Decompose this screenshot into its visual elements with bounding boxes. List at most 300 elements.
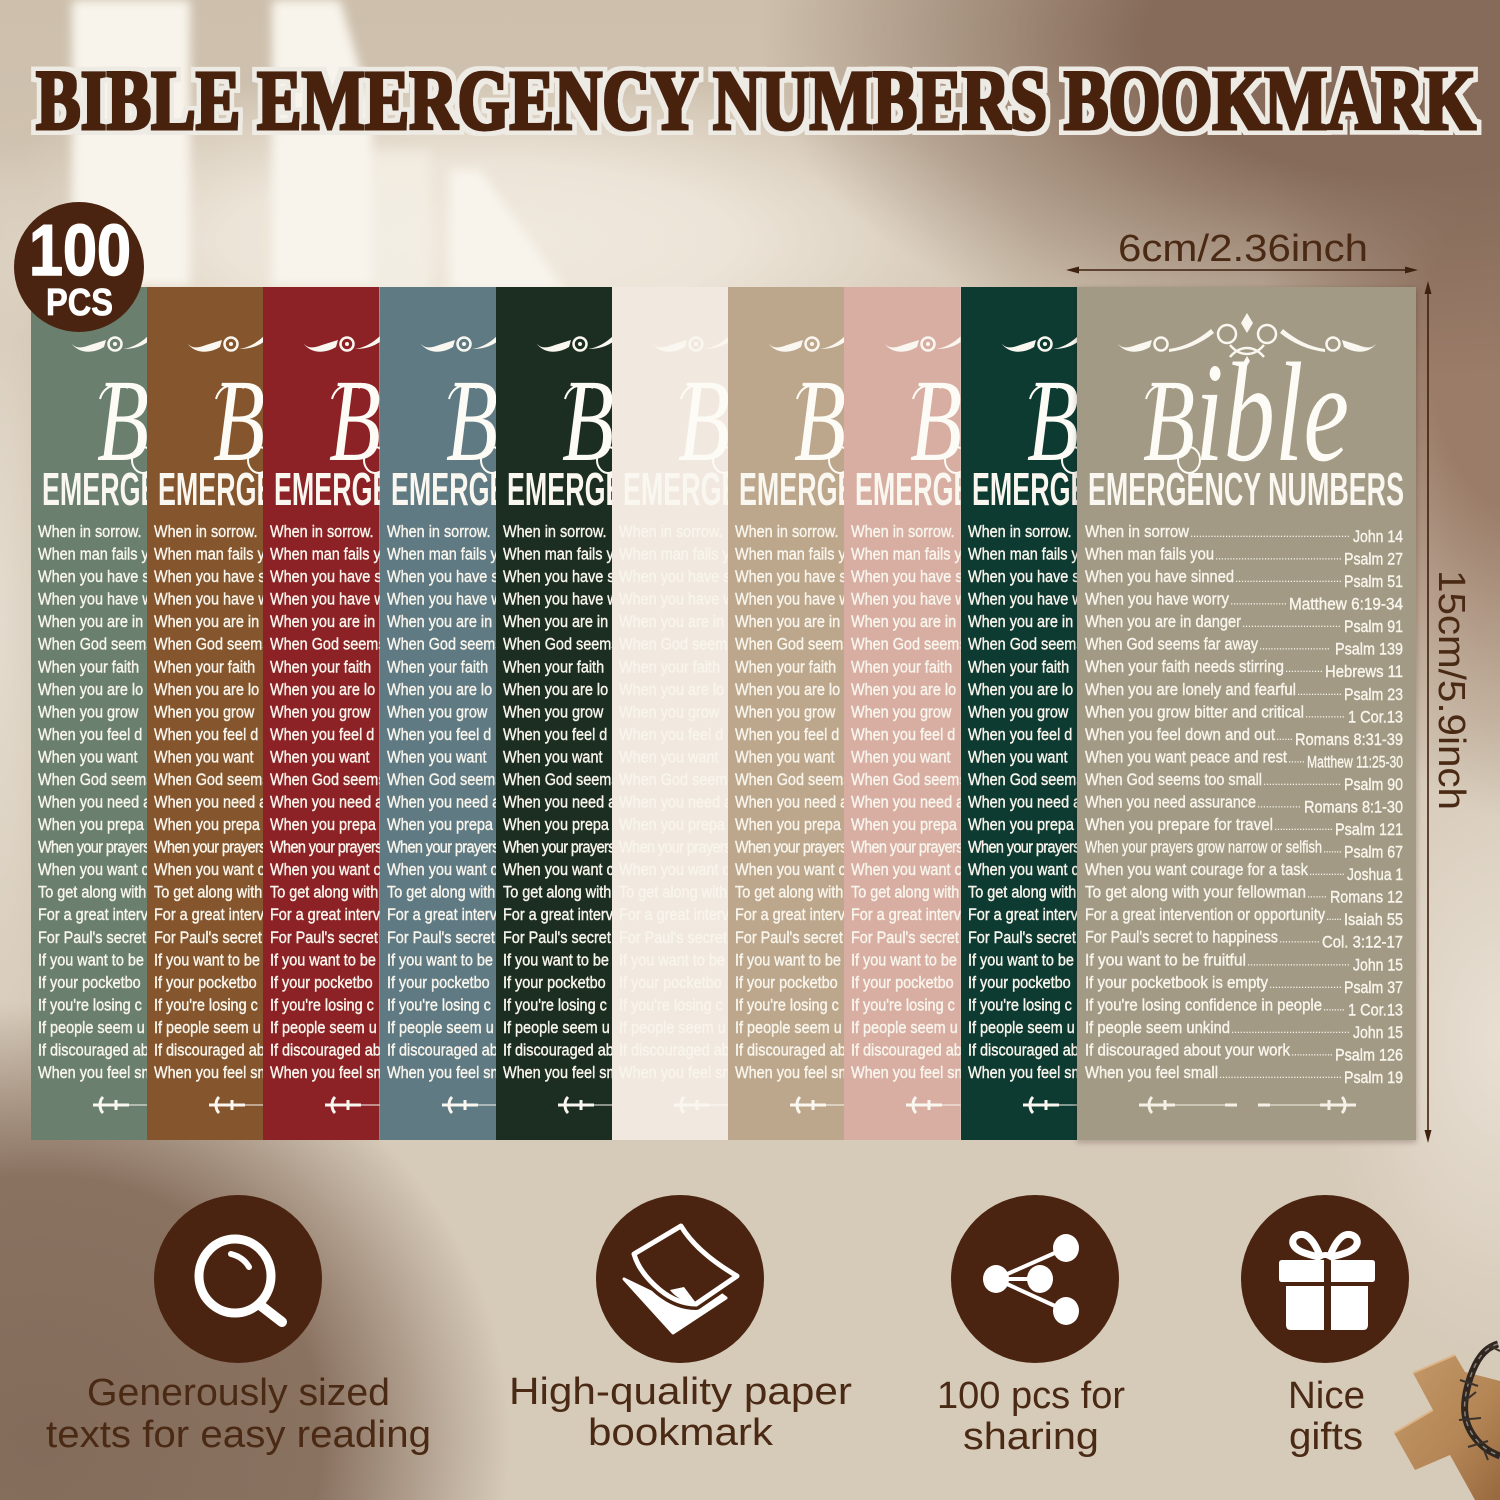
bookmark 6: cream: When you have w bbox=[619, 591, 734, 609]
verse list: Romans 8:1-30 bbox=[1304, 798, 1403, 816]
verse list: Psalm 91 bbox=[1344, 617, 1403, 636]
bookmark 9: deep teal green: If discouraged ab bbox=[968, 1041, 1079, 1060]
bookmark 6: cream: When your faith bbox=[619, 658, 720, 677]
bookmark 2: brown: When you feel d bbox=[154, 726, 258, 744]
bookmark 4: slate blue: When you are in bbox=[387, 613, 492, 632]
bookmark 8: blush pink bbox=[844, 287, 960, 1140]
verse list: Psalm 139 bbox=[1335, 640, 1403, 659]
bookmark 3: red: When you have s bbox=[270, 568, 382, 586]
bookmark 1: sage green: When God seems bbox=[38, 771, 154, 789]
verse list: If you're losing confidence in people bbox=[1085, 995, 1322, 1014]
bookmark 7: tan: When your faith bbox=[735, 658, 836, 677]
verse list: ......................... bbox=[1269, 977, 1342, 991]
bookmark 2: brown: EMERGENCY NUMBERS bbox=[158, 463, 474, 515]
bookmark 9: deep teal green: When God seems bbox=[968, 771, 1084, 789]
bookmark 9: deep teal green: For a great interv bbox=[968, 906, 1078, 925]
bookmark 1: sage green: When your prayers bbox=[38, 839, 151, 857]
bookmark 6: cream: For a great interv bbox=[619, 906, 729, 925]
bookmark 5: dark green: When you need a bbox=[503, 794, 616, 812]
verse list: When you want courage for a task bbox=[1085, 860, 1308, 879]
bookmark 7: tan: When God seems bbox=[735, 636, 851, 654]
icon: wooden cross with crown of thorns bbox=[1394, 1344, 1500, 1500]
bookmark 3: red: When you want bbox=[270, 748, 370, 767]
script word: Bible: Bible bbox=[1143, 333, 1349, 491]
bookmark 5: dark green: When you prepa bbox=[503, 816, 609, 834]
bookmark 4: slate blue bbox=[380, 287, 496, 1140]
bookmark 2: brown: When in sorrow. bbox=[154, 523, 257, 541]
bookmark 1: sage green: When you grow bbox=[38, 703, 139, 722]
bookmark 8: blush pink: When you need a bbox=[851, 794, 964, 812]
bookmark 6: cream: When in sorrow. bbox=[619, 523, 722, 541]
bookmark 4: slate blue: When you need a bbox=[387, 794, 500, 812]
bookmark 3: red: EMERGENCY NUMBERS bbox=[274, 463, 590, 515]
feature: paper quality bbox=[509, 1195, 852, 1454]
bookmark 7: tan: When you grow bbox=[735, 703, 836, 722]
bookmark 5: dark green: When your prayers bbox=[503, 839, 616, 857]
bookmark 3: red: For a great interv bbox=[270, 906, 380, 925]
verse list: ........ bbox=[1323, 999, 1345, 1013]
bookmark 3: red: When man fails y bbox=[270, 546, 381, 564]
verse list: When your faith needs stirring bbox=[1085, 657, 1284, 676]
caption: gifts bbox=[1289, 1416, 1363, 1458]
verse list: When God seems far away bbox=[1085, 635, 1258, 654]
verse list: ....... bbox=[1307, 887, 1327, 901]
bookmark 7: tan: When you want bbox=[735, 748, 835, 767]
bookmark 9: deep teal green: When you have w bbox=[968, 591, 1083, 609]
bookmark 7: tan: When God seems bbox=[735, 771, 851, 789]
bookmark 2: brown: To get along with bbox=[154, 884, 262, 902]
bookmark 1: sage green: When you need a bbox=[38, 794, 151, 812]
verse list: Matthew 6:19-34 bbox=[1289, 595, 1403, 614]
badge: 100 PCS: PCS bbox=[46, 282, 113, 324]
verse list: ............... bbox=[1257, 796, 1301, 810]
bookmark 9: deep teal green: For Paul's secret bbox=[968, 929, 1076, 947]
bookmark 3: red: When in sorrow. bbox=[270, 523, 373, 541]
bookmark 3: red: When God seems bbox=[270, 771, 386, 789]
bookmark 2: brown: When you are in bbox=[154, 613, 259, 632]
bookmark 8: blush pink: When you have s bbox=[851, 568, 963, 586]
bookmark 7: tan: When you feel sm bbox=[735, 1064, 851, 1082]
caption: High-quality paper bbox=[509, 1371, 852, 1413]
bookmark 3: red: When you grow bbox=[270, 703, 371, 722]
bookmark 5: dark green: For Paul's secret bbox=[503, 929, 611, 947]
verse list: When you feel small bbox=[1085, 1063, 1218, 1082]
bookmark 9: deep teal green: When you prepa bbox=[968, 816, 1074, 834]
bookmark 6: cream: When your prayers bbox=[619, 839, 732, 857]
bookmark 2: brown: When you want bbox=[154, 748, 254, 767]
verse list: When you prepare for travel bbox=[1085, 815, 1273, 834]
bookmark 9: deep teal green: When you are lo bbox=[968, 681, 1073, 699]
bookmark 2: brown: When you feel sm bbox=[154, 1064, 270, 1082]
bookmark 1: sage green: When you are lo bbox=[38, 681, 143, 699]
bookmark 3: red: Bible bbox=[329, 333, 535, 491]
bookmark 7: tan: For a great interv bbox=[735, 906, 845, 925]
bookmark 5: dark green: When you feel d bbox=[503, 726, 607, 744]
bookmark 8: blush pink: When you are lo bbox=[851, 681, 956, 699]
bookmark 2: brown: When you grow bbox=[154, 703, 255, 722]
bookmark 4: slate blue: When you have w bbox=[387, 591, 502, 609]
bookmark 5: dark green: When you are lo bbox=[503, 681, 608, 699]
bookmark 4: slate blue: To get along with bbox=[387, 884, 495, 902]
bookmark 6: cream: When you are lo bbox=[619, 681, 724, 699]
bookmark 6: cream: Bible bbox=[678, 333, 884, 491]
bookmark 6: cream: If you want to be bbox=[619, 951, 725, 970]
verse list: Hebrews 11 bbox=[1325, 662, 1403, 681]
bookmark 5: dark green: EMERGENCY NUMBERS bbox=[507, 463, 823, 515]
bookmark 8: blush pink: When God seems bbox=[851, 636, 967, 654]
bookmark 2: brown: If you want to be bbox=[154, 951, 260, 970]
bookmark 1: sage green: If discouraged ab bbox=[38, 1041, 149, 1060]
bookmark 6: cream: When you want bbox=[619, 748, 719, 767]
bookmark 1: sage green: When you want bbox=[38, 748, 138, 767]
verse list: When you are in danger bbox=[1085, 612, 1241, 631]
verse list: To get along with your fellowman bbox=[1085, 883, 1306, 902]
bookmark 1: sage green bbox=[31, 287, 147, 1140]
bookmark 1: sage green: When man fails y bbox=[38, 546, 149, 564]
bookmark 8: blush pink: When God seems bbox=[851, 771, 967, 789]
bookmark 9: deep teal green: When you need a bbox=[968, 794, 1081, 812]
bookmark 4: slate blue: When in sorrow. bbox=[387, 523, 490, 541]
bookmark 3: red: When God seems bbox=[270, 636, 386, 654]
bookmark 8: blush pink: If people seem u bbox=[851, 1019, 958, 1037]
bookmark 4: slate blue: When you want c bbox=[387, 861, 498, 879]
bookmark 5: dark green: To get along with bbox=[503, 884, 611, 902]
bookmark 6: cream: When you grow bbox=[619, 703, 720, 722]
bookmark 1: sage green: EMERGENCY NUMBERS bbox=[42, 463, 358, 515]
bookmark 5: dark green: If discouraged ab bbox=[503, 1041, 614, 1060]
bookmark 4: slate blue: If you want to be bbox=[387, 951, 493, 970]
bookmark 5: dark green: For a great interv bbox=[503, 906, 613, 925]
bookmark 8: blush pink: If your pocketbo bbox=[851, 974, 954, 992]
bookmark 7: tan: When you prepa bbox=[735, 816, 841, 834]
verse list: Psalm 90 bbox=[1344, 775, 1403, 794]
verse list: Psalm 19 bbox=[1344, 1068, 1403, 1087]
verse list: If people seem unkind bbox=[1085, 1018, 1230, 1037]
bookmark 4: slate blue: When you grow bbox=[387, 703, 488, 722]
caption: Generously sized bbox=[87, 1372, 390, 1414]
bookmark 7: tan bbox=[728, 287, 844, 1140]
verse list: When you have sinned bbox=[1085, 567, 1234, 586]
bookmark 9: deep teal green: When you want c bbox=[968, 861, 1079, 879]
bookmark 7: tan: When your prayers bbox=[735, 839, 848, 857]
verse list: John 15 bbox=[1353, 1023, 1403, 1042]
bookmark 9: deep teal green: When God seems bbox=[968, 636, 1084, 654]
bookmark 7: tan: When man fails y bbox=[735, 546, 846, 564]
verse list: When you need assurance bbox=[1085, 792, 1256, 812]
verse list: ........................................... bbox=[1219, 1067, 1342, 1081]
bookmark 4: slate blue: When you have s bbox=[387, 568, 499, 586]
bookmark 6: cream: EMERGENCY NUMBERS bbox=[623, 463, 939, 515]
verse list: .................................... bbox=[1247, 954, 1350, 968]
verse list: .................................. bbox=[1242, 616, 1341, 630]
bookmark 9: deep teal green: When your prayers bbox=[968, 839, 1081, 857]
bookmark 8: blush pink: Bible bbox=[910, 333, 1116, 491]
bookmark 7: tan: When you feel d bbox=[735, 726, 839, 744]
verse list: ............. bbox=[1309, 864, 1345, 878]
icon: magnifier bbox=[154, 1195, 322, 1363]
bookmark 7: tan: For Paul's secret bbox=[735, 929, 843, 947]
verse list: 1 Cor.13 bbox=[1348, 1000, 1403, 1019]
bookmark 3: red: When your faith bbox=[270, 658, 371, 677]
bookmark 7: tan: When you have w bbox=[735, 591, 850, 609]
verse list: Col. 3:12-17 bbox=[1322, 933, 1403, 952]
caption bbox=[1288, 1375, 1365, 1458]
bookmark 4: slate blue: Bible bbox=[446, 333, 652, 491]
bookmark 8: blush pink: When you want bbox=[851, 748, 951, 767]
bookmark 7: tan: When you are lo bbox=[735, 681, 840, 699]
bookmark 4: slate blue: If people seem u bbox=[387, 1019, 494, 1037]
bookmark 7: tan: If discouraged ab bbox=[735, 1041, 846, 1060]
bookmark 1: sage green: If you're losing c bbox=[38, 996, 142, 1015]
bookmark 4: slate blue: When your prayers bbox=[387, 839, 500, 857]
bookmark 3: red: When you are lo bbox=[270, 681, 375, 699]
verse list: If your pocketbook is empty bbox=[1085, 973, 1268, 992]
bookmark 4: slate blue: When you feel d bbox=[387, 726, 491, 744]
verse list: Isaiah 55 bbox=[1344, 910, 1403, 929]
bookmark 5: dark green: When you grow bbox=[503, 703, 604, 722]
bookmark 1: sage green: When in sorrow. bbox=[38, 523, 141, 541]
bookmark 6: cream: For Paul's secret bbox=[619, 929, 727, 947]
bookmark 9: deep teal green: If you're losing c bbox=[968, 996, 1072, 1015]
verse list: When your prayers grow narrow or selfish bbox=[1085, 838, 1322, 857]
icon: paper sheets bbox=[596, 1195, 764, 1363]
verse list: Psalm 37 bbox=[1344, 978, 1403, 997]
verse list: ...... bbox=[1276, 729, 1293, 743]
bookmark 2: brown: When you have w bbox=[154, 591, 269, 609]
verse list: When you feel down and out bbox=[1085, 725, 1275, 744]
bookmark 6: cream: If you're losing c bbox=[619, 996, 723, 1015]
bookmark 5: dark green: When in sorrow. bbox=[503, 523, 606, 541]
bookmark 3: red: For Paul's secret bbox=[270, 929, 378, 947]
verse list: Romans 8:31-39 bbox=[1295, 730, 1403, 749]
verse list: ............................................ bbox=[1215, 548, 1342, 562]
bookmark 8: blush pink: If discouraged ab bbox=[851, 1041, 962, 1060]
bookmark 4: slate blue: When you are lo bbox=[387, 681, 492, 699]
feature: large text bbox=[46, 1195, 431, 1456]
bookmark 3: red: If you want to be bbox=[270, 951, 376, 970]
verse list: John 15 bbox=[1353, 955, 1403, 974]
bookmark 3: red: If people seem u bbox=[270, 1019, 377, 1037]
caption: sharing bbox=[963, 1416, 1099, 1458]
bookmark 6: cream: When man fails y bbox=[619, 546, 730, 564]
caption: 100 pcs for bbox=[937, 1375, 1125, 1417]
bookmark 8: blush pink: When you grow bbox=[851, 703, 952, 722]
bookmark 6: cream: If discouraged ab bbox=[619, 1041, 730, 1060]
bookmark 4: slate blue: EMERGENCY NUMBERS bbox=[391, 463, 707, 515]
verse list: If you want to be fruitful bbox=[1085, 950, 1246, 969]
bookmark 7: tan: When you want c bbox=[735, 861, 846, 879]
bookmark 5: dark green: If you want to be bbox=[503, 951, 609, 970]
bookmark 6: cream: When you need a bbox=[619, 794, 732, 812]
verse list: When God seems too small bbox=[1085, 770, 1262, 789]
verse list: When you want peace and rest bbox=[1085, 747, 1287, 766]
icon: share nodes bbox=[951, 1195, 1119, 1363]
bookmark 3: red: When you prepa bbox=[270, 816, 376, 834]
verse list: Psalm 27 bbox=[1344, 550, 1403, 568]
bookmark 6: cream: When you prepa bbox=[619, 816, 725, 834]
bookmark 5: dark green: When God seems bbox=[503, 636, 619, 654]
bookmark 7: tan: If your pocketbo bbox=[735, 974, 838, 992]
bookmark 7: tan: If people seem u bbox=[735, 1019, 842, 1037]
bookmark 2: brown: When you prepa bbox=[154, 816, 260, 834]
icon: gift box bbox=[1241, 1195, 1409, 1363]
verse list: ..................................... bbox=[1235, 571, 1342, 585]
caption: bookmark bbox=[588, 1412, 774, 1454]
bookmark 2: brown: For Paul's secret bbox=[154, 929, 262, 947]
bookmark 7: tan: Bible bbox=[794, 333, 1000, 491]
bookmark 8: blush pink: When man fails y bbox=[851, 546, 962, 564]
bookmark 9: deep teal green bbox=[961, 287, 1077, 1140]
bookmark 4: slate blue: When you feel sm bbox=[387, 1064, 503, 1082]
bookmark 8: blush pink: When your faith bbox=[851, 658, 952, 677]
bookmark 5: dark green: When you want c bbox=[503, 861, 614, 879]
verse list: ............. bbox=[1285, 661, 1323, 675]
bookmark 5: dark green: When you feel sm bbox=[503, 1064, 619, 1082]
bookmark 8: blush pink: EMERGENCY NUMBERS bbox=[855, 463, 1171, 515]
bookmark 8: blush pink: When you want c bbox=[851, 861, 962, 879]
bookmark 5: dark green: If people seem u bbox=[503, 1019, 610, 1037]
verse list bbox=[1085, 522, 1403, 1087]
bookmark 7: tan: When in sorrow. bbox=[735, 523, 838, 541]
bookmark 8: blush pink: When in sorrow. bbox=[851, 523, 954, 541]
verse list: ..................... bbox=[1274, 819, 1333, 833]
bookmark 10: full khaki bookmark bbox=[1077, 287, 1416, 1140]
badge: 100 PCS bbox=[14, 202, 144, 332]
bookmark 2: brown: When you are lo bbox=[154, 681, 259, 699]
bookmark 5: dark green: If you're losing c bbox=[503, 996, 607, 1015]
verse list: ...... bbox=[1326, 909, 1342, 923]
bookmark 8: blush pink: When you feel d bbox=[851, 726, 955, 744]
badge: 100 PCS: 100 bbox=[29, 211, 131, 291]
bookmark 3: red: If you're losing c bbox=[270, 996, 374, 1015]
bookmark 5: dark green: When you want bbox=[503, 748, 603, 767]
bookmark 2: brown: When your faith bbox=[154, 658, 255, 677]
bookmark 3: red: If your pocketbo bbox=[270, 974, 373, 992]
bookmark 3: red: When you feel d bbox=[270, 726, 374, 744]
bookmark 3: red: When you feel sm bbox=[270, 1064, 386, 1082]
verse list: ....... bbox=[1323, 842, 1342, 856]
verse list: When in sorrow bbox=[1085, 522, 1190, 541]
bookmark 5: dark green: When you have w bbox=[503, 591, 618, 609]
bookmark 5: dark green: When you are in bbox=[503, 613, 608, 632]
bookmark 4: slate blue: When your faith bbox=[387, 658, 488, 677]
verse list: If discouraged about your work bbox=[1085, 1040, 1290, 1059]
bookmark 8: blush pink: When you feel sm bbox=[851, 1064, 967, 1082]
bookmark 3: red bbox=[263, 287, 380, 1140]
bookmark 9: deep teal green: When you grow bbox=[968, 703, 1069, 722]
bookmark 8: blush pink: To get along with bbox=[851, 884, 959, 902]
bookmark 3: red: When your prayers bbox=[270, 839, 383, 857]
bookmark 1: sage green: If your pocketbo bbox=[38, 974, 141, 992]
ornament: bottom divider bbox=[1139, 1097, 1356, 1113]
bookmark 5: dark green: Bible bbox=[562, 333, 768, 491]
bookmark 5: dark green: When you have s bbox=[503, 568, 615, 586]
bookmark 9: deep teal green: When your faith bbox=[968, 658, 1069, 677]
bookmark 3: red: When you need a bbox=[270, 794, 383, 812]
caption bbox=[509, 1371, 852, 1454]
caption: texts for easy reading bbox=[46, 1414, 431, 1456]
bookmark 5: dark green bbox=[496, 287, 612, 1140]
bookmark 4: slate blue: When you want bbox=[387, 748, 487, 767]
verse list: John 14 bbox=[1353, 527, 1403, 546]
bookmark 5: dark green: When man fails y bbox=[503, 546, 614, 564]
bookmark 7: tan: If you're losing c bbox=[735, 996, 839, 1015]
verse list: ......................... bbox=[1259, 639, 1330, 653]
bookmark 9: deep teal green: Bible bbox=[1027, 333, 1233, 491]
bookmark 1: sage green: When you have s bbox=[38, 568, 150, 586]
bookmark 5: dark green: If your pocketbo bbox=[503, 974, 606, 992]
bookmark 8: blush pink: If you want to be bbox=[851, 951, 957, 970]
bookmark 2: brown: When you need a bbox=[154, 794, 267, 812]
bookmark 1: sage green: To get along with bbox=[38, 884, 146, 902]
feature: sharing bbox=[937, 1195, 1125, 1458]
bookmark 9: deep teal green: When you are in bbox=[968, 613, 1073, 632]
bookmark 1: sage green: When you prepa bbox=[38, 816, 144, 834]
bookmark 9: deep teal green: When you feel d bbox=[968, 726, 1072, 744]
bookmark 6: cream: When you feel sm bbox=[619, 1064, 735, 1082]
bookmark 6: cream: When God seems bbox=[619, 771, 735, 789]
bookmark 9: deep teal green: When in sorrow. bbox=[968, 523, 1071, 541]
bookmark 5: dark green: When God seems bbox=[503, 771, 619, 789]
verse list: For a great intervention or opportunity bbox=[1085, 905, 1325, 924]
verse list: .............. bbox=[1279, 932, 1320, 946]
bookmark 2: brown: Bible bbox=[213, 333, 419, 491]
bookmark 1: sage green: When you have w bbox=[38, 591, 153, 609]
bookmark 3: red: To get along with bbox=[270, 884, 378, 902]
bookmark 1: sage green: When you are in bbox=[38, 613, 143, 632]
bookmark 8: blush pink: When your prayers bbox=[851, 839, 964, 857]
bookmark 2: brown: If discouraged ab bbox=[154, 1041, 265, 1060]
dimension: width arrow and label: 6cm/2.36inch bbox=[1118, 228, 1368, 270]
verse list: ............... bbox=[1291, 1044, 1333, 1058]
bookmark 8: blush pink: If you're losing c bbox=[851, 996, 955, 1015]
bookmark 2: brown: When God seems bbox=[154, 636, 270, 654]
bookmark 6: cream: When you are in bbox=[619, 613, 724, 632]
bookmark 7: tan: When you need a bbox=[735, 794, 848, 812]
bookmark 8: blush pink: For Paul's secret bbox=[851, 929, 959, 947]
bookmark 9: deep teal green: To get along with bbox=[968, 884, 1076, 902]
bookmark 4: slate blue: If your pocketbo bbox=[387, 974, 490, 992]
verse list: When you have worry bbox=[1085, 590, 1229, 609]
verse list: Psalm 121 bbox=[1335, 820, 1403, 839]
bookmark 3: red: When you have w bbox=[270, 591, 385, 609]
window light panes bbox=[72, 0, 565, 290]
verse list: .................... bbox=[1230, 594, 1287, 608]
verse list: Psalm 126 bbox=[1335, 1045, 1403, 1064]
verse list: Psalm 67 bbox=[1344, 843, 1403, 862]
bookmark 4: slate blue: For a great interv bbox=[387, 906, 497, 925]
bookmark 1: sage green: When your faith bbox=[38, 658, 139, 677]
bookmark 9: deep teal green: When you want bbox=[968, 748, 1068, 767]
bookmark 9: deep teal green: When you have s bbox=[968, 568, 1080, 586]
bookmark 4: slate blue: When God seems bbox=[387, 636, 503, 654]
bookmark 4: slate blue: When God seems bbox=[387, 771, 503, 789]
bookmark 2: brown bbox=[147, 287, 263, 1140]
bookmark 1: sage green: For Paul's secret bbox=[38, 929, 146, 947]
verse list: 1 Cor.13 bbox=[1348, 707, 1403, 726]
verse list: Psalm 51 bbox=[1344, 572, 1403, 591]
verse list: When you grow bitter and critical bbox=[1085, 702, 1304, 721]
dimension: height arrow and label: 15cm/5.9inch bbox=[1430, 570, 1472, 810]
bookmark 6: cream: When God seems bbox=[619, 636, 735, 654]
bookmark 1: sage green: When God seems bbox=[38, 636, 154, 654]
bookmark 2: brown: If you're losing c bbox=[154, 996, 258, 1015]
ornament: top flourish bbox=[1117, 313, 1377, 366]
verse list: Joshua 1 bbox=[1347, 865, 1403, 884]
bookmark 8: blush pink: When you prepa bbox=[851, 816, 957, 834]
bookmark 8: blush pink: For a great interv bbox=[851, 906, 961, 925]
bookmark 7: tan: When you have s bbox=[735, 568, 847, 586]
